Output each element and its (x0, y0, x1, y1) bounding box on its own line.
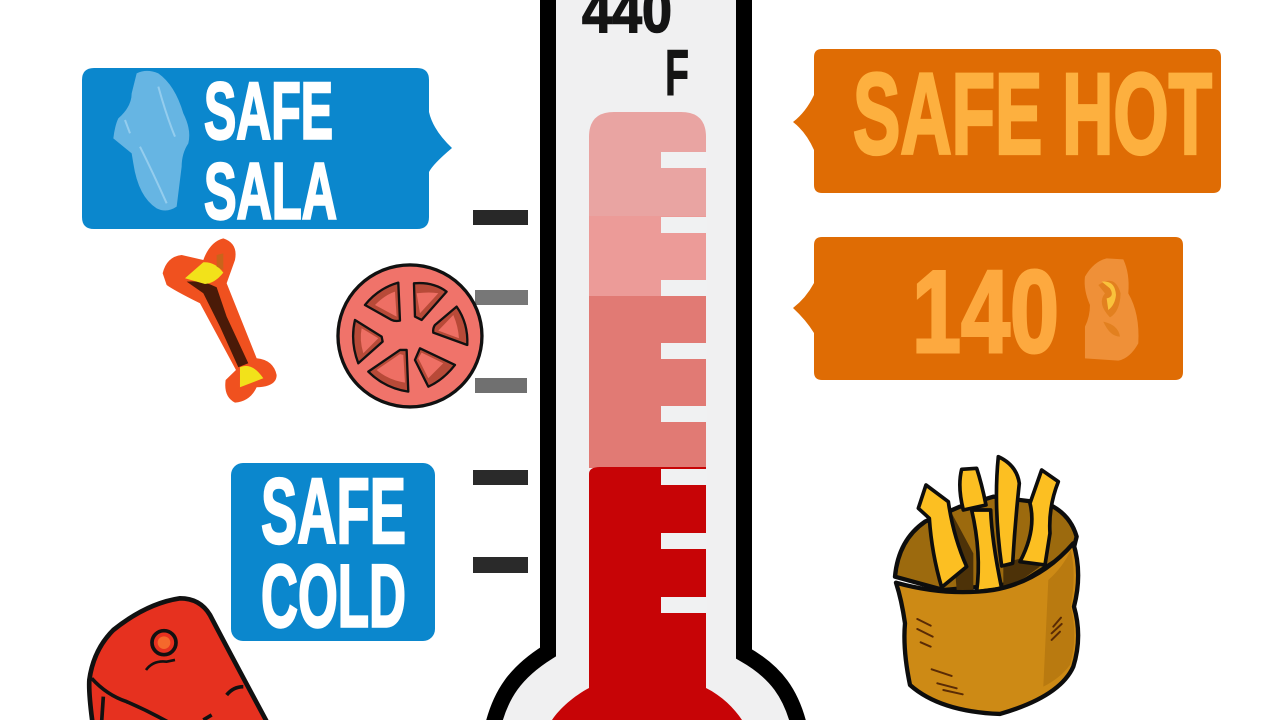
text: COLD: COLD (261, 546, 406, 646)
bag crease marks (917, 618, 1062, 694)
callout: safe hot (793, 49, 1221, 193)
wheel disc (338, 265, 482, 407)
icon: red steak (89, 598, 277, 720)
thermometer body (492, 0, 800, 720)
callout: safe cold (231, 459, 435, 646)
bag front (896, 543, 1078, 714)
bag shaded side (1043, 550, 1074, 687)
text: SAFE: SAFE (204, 66, 333, 156)
bag interior (895, 497, 1077, 590)
left tick marks (473, 210, 528, 573)
mercury column: pale band (589, 216, 706, 297)
icon: round sliced tomato wheel (338, 265, 482, 407)
callout box (793, 49, 1221, 193)
mercury column: mid band (589, 296, 706, 468)
steak mark (146, 660, 175, 670)
wedge highlights (361, 292, 459, 383)
mercury column and bulb: red (552, 467, 742, 720)
dark gaps between fries (950, 510, 1040, 590)
steak bone marrow (158, 636, 170, 649)
text: 140: 140 (912, 246, 1059, 377)
text: SAFE: SAFE (261, 459, 406, 563)
temperature label: F: F (665, 36, 689, 109)
fries (918, 457, 1058, 592)
text: SALA: SALA (204, 146, 337, 236)
callout: 140 (793, 237, 1183, 380)
icon: bone (163, 238, 277, 403)
icon: pale blue ice blob (113, 71, 189, 210)
steak fat line (92, 678, 243, 720)
thermometer (492, 0, 800, 720)
icon: orange ear shape (1085, 258, 1139, 361)
steak bone ring (152, 631, 176, 655)
steak outline (89, 598, 277, 720)
wheel wedges (353, 283, 467, 392)
callout box (82, 68, 452, 229)
callout box (793, 237, 1183, 380)
scale notches (661, 152, 707, 613)
icon: fries in a paper bag (895, 457, 1078, 714)
callout: safe sala (82, 66, 452, 236)
mercury column: palest band (589, 112, 706, 217)
callout box (231, 463, 435, 641)
